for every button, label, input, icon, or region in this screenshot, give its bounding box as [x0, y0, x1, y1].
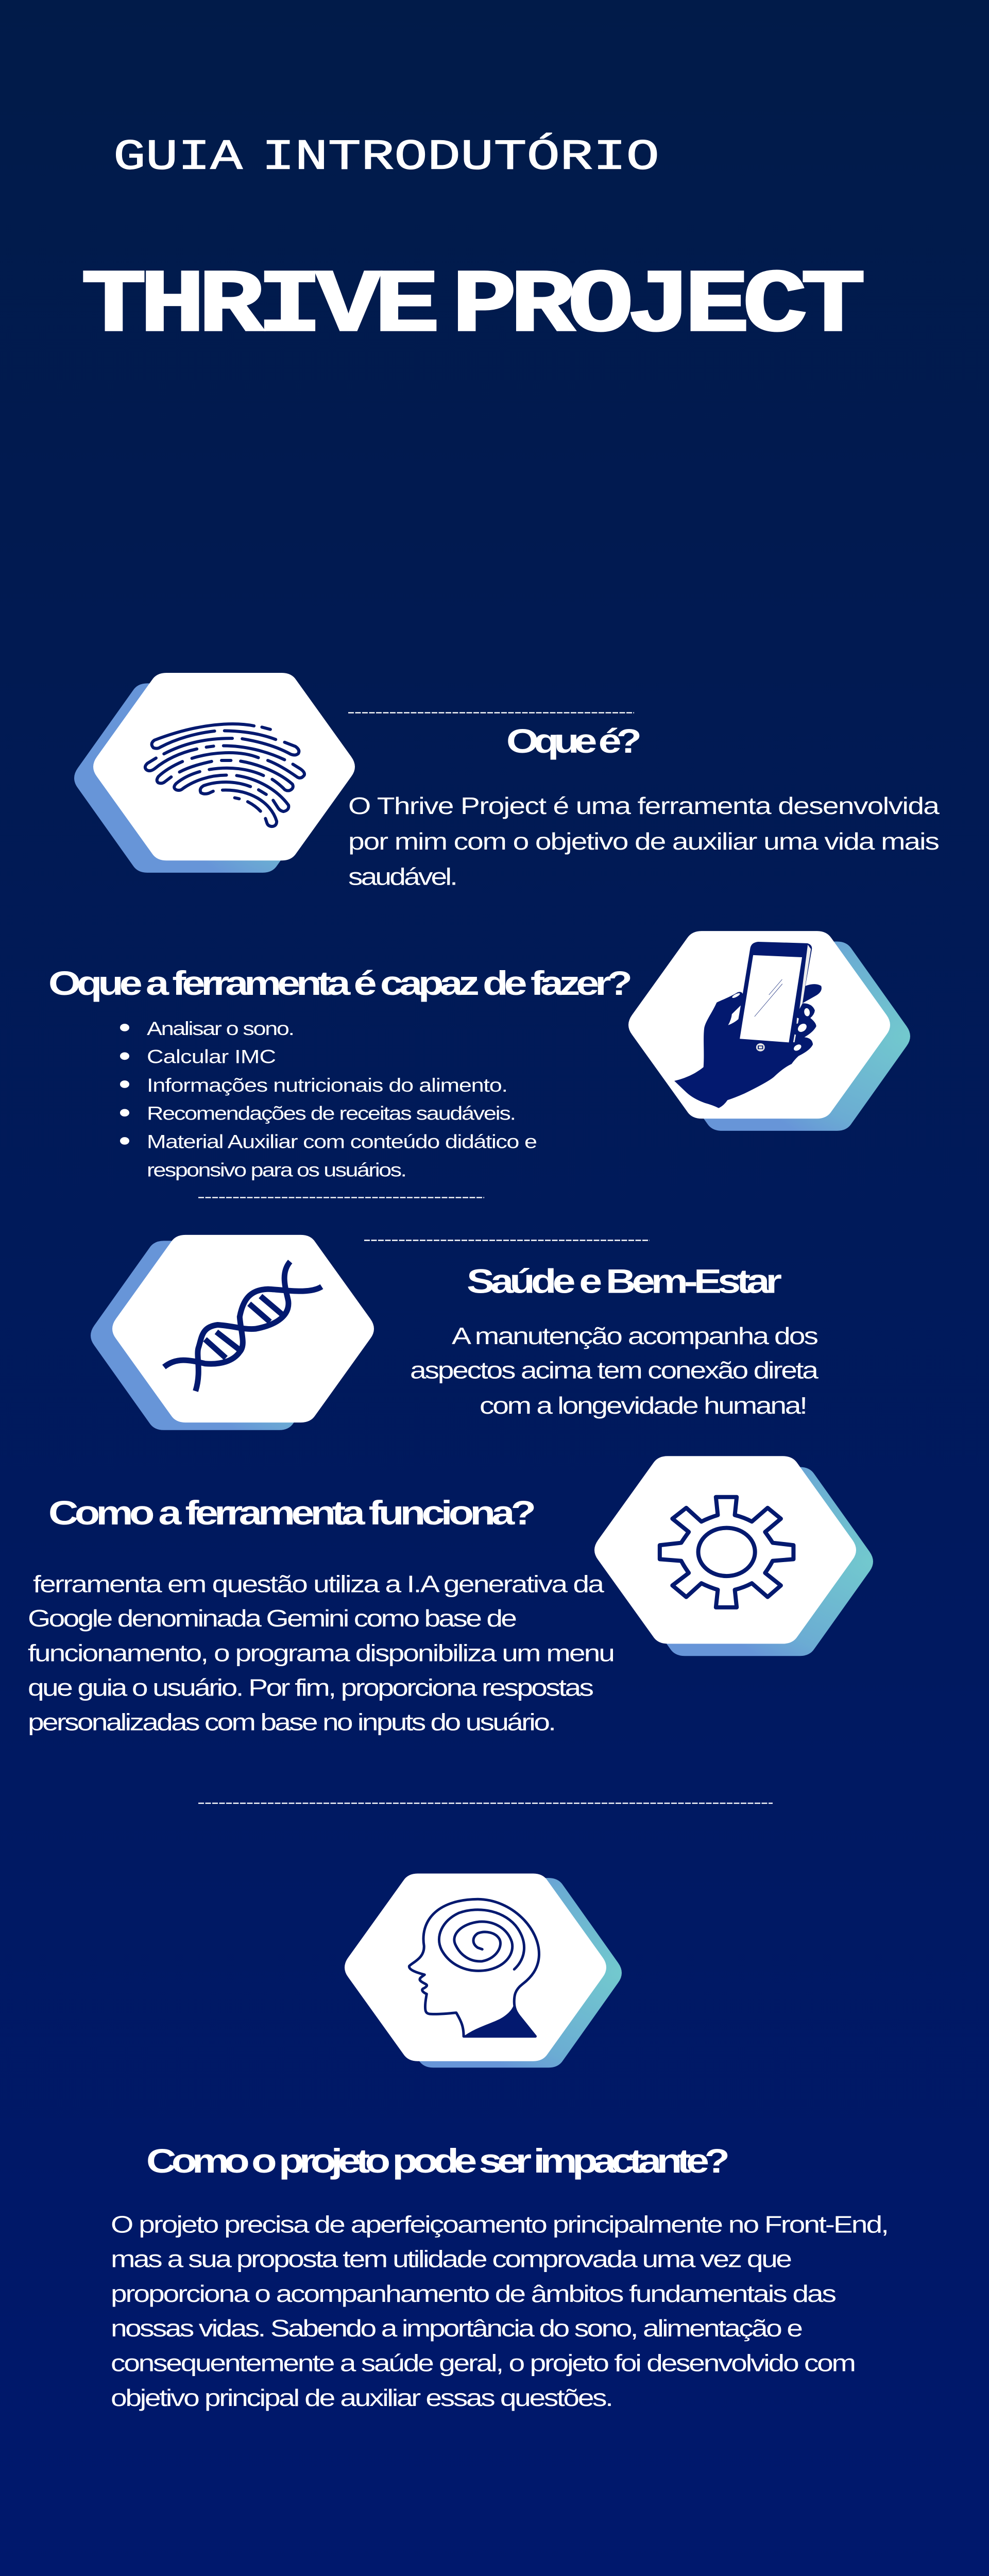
list: capacidades: Analisar o sono.: [147, 1018, 295, 1039]
subtitle: guia introdutório: [113, 132, 659, 182]
text: impacto: objetivo principal de auxiliar essas questões.: [111, 2385, 613, 2412]
text: como funciona: Google denominada Gemini como base de: [28, 1605, 517, 1632]
text: impacto: nossas vidas. Sabendo a importância do sono, alimentação e: [111, 2315, 803, 2342]
subtitle: guia introdutório: INTRODUTÓRIO: [262, 132, 659, 182]
panel: como funciona: [28, 1456, 873, 1736]
heading: saúde e bem-estar: Saúde e Bem-Estar: [467, 1262, 782, 1300]
text: impacto: proporciona o acompanhamento de âmbitos fundamentais das: [111, 2281, 837, 2308]
heading: o que é: Oque é?: [506, 722, 642, 760]
text: saúde e bem-estar: [410, 1323, 819, 1419]
text: impacto: mas a sua proposta tem utilidade comprovada uma vez que: [111, 2246, 792, 2273]
icon: hexagon with fingerprint: [74, 673, 355, 873]
text: o que é: saudável.: [348, 863, 458, 890]
heading: impacto: Como o projeto pode ser impactante?: [146, 2142, 730, 2180]
text: saúde e bem-estar: A manutenção acompanha dos: [452, 1323, 819, 1349]
text: impacto: consequentemente a saúde geral, o projeto foi desenvolvido com: [111, 2350, 856, 2377]
text: impacto: O projeto precisa de aperfeiçoamento principalmente no Front-End,: [111, 2211, 889, 2238]
text: como funciona: personalizadas com base no inputs do usuário.: [28, 1709, 556, 1736]
subtitle: guia introdutório: GUIA: [113, 133, 243, 182]
panel: o que é: [74, 673, 940, 890]
list: capacidades: responsivo para os usuários.: [147, 1160, 407, 1181]
icon: hexagon with dna: [91, 1235, 374, 1430]
text: o que é: [348, 793, 940, 890]
icon: hexagon with head and spiral: [345, 1874, 622, 2067]
text: como funciona: ferramenta em questão utiliza a I.A generativa da: [33, 1571, 604, 1598]
heading: como funciona: Como a ferramenta funciona?: [48, 1494, 536, 1532]
panel: impacto: [111, 1874, 889, 2412]
list: capacidades: Calcular IMC: [147, 1046, 276, 1067]
list: capacidades: Informações nutricionais do alimento.: [147, 1075, 508, 1096]
title: thrive project: PROJECT: [452, 256, 863, 358]
text: como funciona: funcionamento, o programa disponibiliza um menu: [28, 1640, 615, 1667]
heading: capacidades: Oque a ferramenta é capaz de fazer?: [48, 964, 633, 1002]
text: como funciona: que guia o usuário. Por fim, proporciona respostas: [28, 1674, 594, 1701]
panel: saúde e bem-estar: [91, 1235, 819, 1430]
title: thrive project: [81, 256, 863, 358]
list: capacidades: Recomendações de receitas saudáveis.: [147, 1103, 516, 1124]
icon: hexagon with gear: [594, 1456, 873, 1656]
title: thrive project: THRIVE: [81, 256, 436, 358]
text: impacto: [111, 2211, 889, 2412]
icon: hexagon with hand holding phone: [628, 931, 910, 1131]
text: saúde e bem-estar: com a longevidade humana!: [480, 1393, 808, 1419]
text: o que é: O Thrive Project é uma ferramenta desenvolvida: [348, 793, 940, 819]
text: como funciona: [28, 1571, 615, 1736]
list: capacidades: Material Auxiliar com conteúdo didático e: [147, 1131, 537, 1152]
text: saúde e bem-estar: aspectos acima tem conexão direta: [410, 1357, 819, 1384]
panel: capacidades: [48, 931, 910, 1181]
text: o que é: por mim com o objetivo de auxiliar uma vida mais: [348, 828, 940, 855]
list: capacidades: [120, 1018, 537, 1181]
